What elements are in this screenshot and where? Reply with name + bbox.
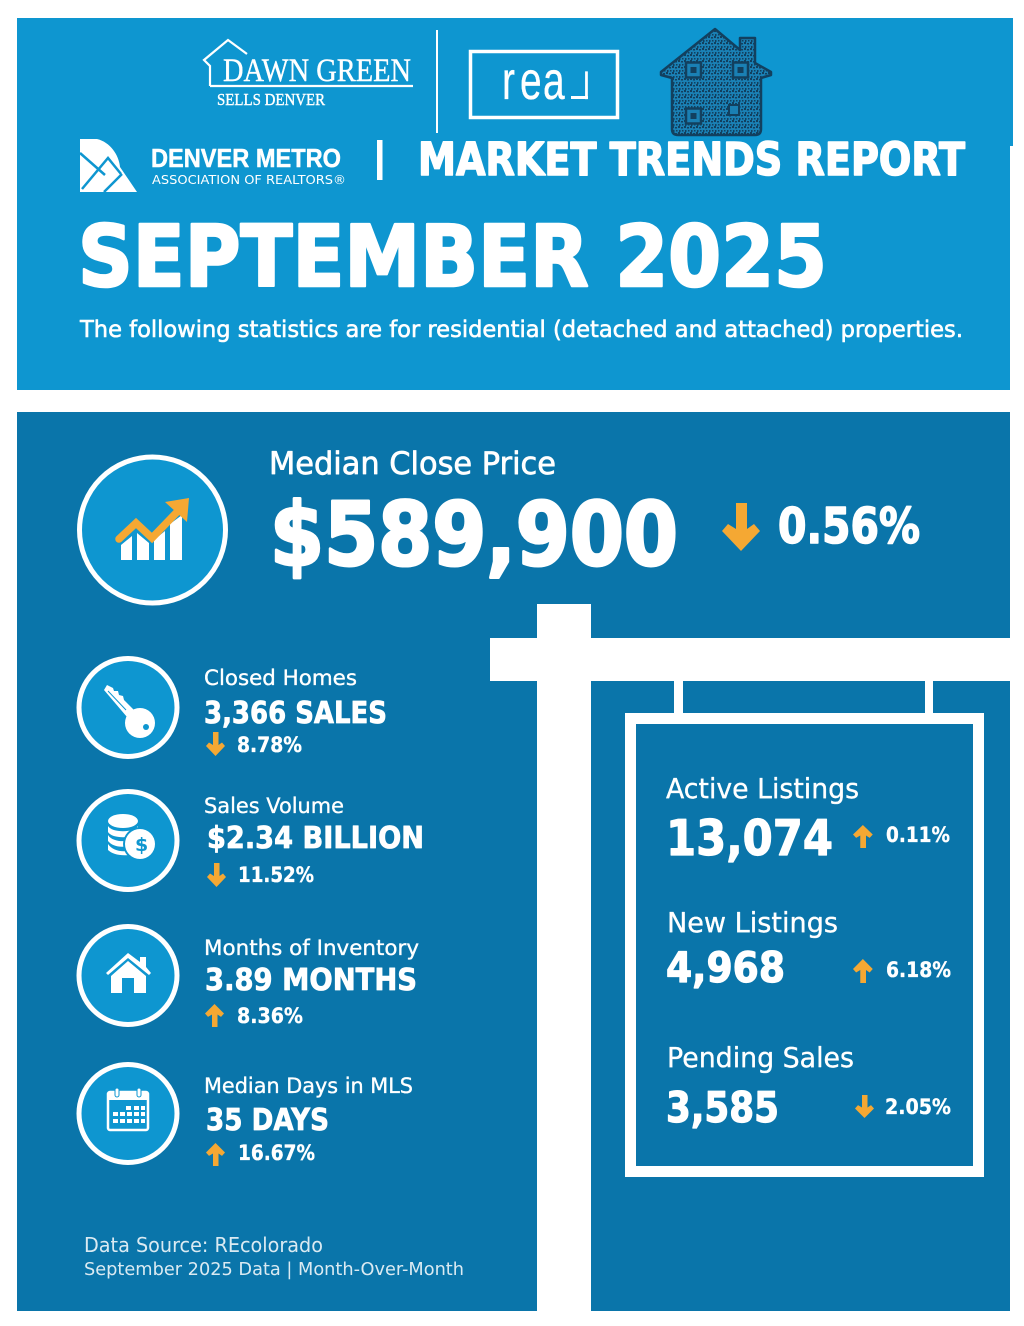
stat: Median Days in MLS: Median Days in MLS bbox=[204, 1074, 413, 1099]
logo: real: r bbox=[502, 50, 515, 110]
heading divider bbox=[377, 140, 382, 180]
stat: Closed Homes: 3,366 SALES bbox=[204, 696, 387, 731]
stat: Median Close Price: Median Close Price bbox=[269, 446, 556, 482]
stat: Sales Volume: 11.52% bbox=[238, 863, 314, 887]
logo: real: l bbox=[583, 66, 589, 108]
stat: Closed Homes: Closed Homes bbox=[204, 666, 357, 691]
arrow: down bbox=[206, 732, 225, 756]
logo divider bbox=[436, 30, 438, 133]
stat: Median Close Price: 0.56% bbox=[778, 498, 920, 555]
stat: Sales Volume: $2.34 BILLION bbox=[207, 821, 424, 856]
icon: rising chart bbox=[80, 457, 226, 603]
stat: Median Days in MLS bbox=[79, 1064, 413, 1166]
stat: Closed Homes: 8.78% bbox=[237, 733, 302, 757]
stat: Pending Sales: 3,585 bbox=[666, 1083, 779, 1132]
arrow: up bbox=[853, 959, 873, 983]
arrow: up bbox=[205, 1004, 224, 1027]
stat: New Listings: 4,968 bbox=[666, 943, 785, 992]
stat: Pending Sales bbox=[666, 1041, 951, 1132]
stat: Months of Inventory: 8.36% bbox=[237, 1004, 303, 1028]
icon: calendar bbox=[79, 1064, 177, 1162]
stat: Pending Sales: 2.05% bbox=[885, 1095, 951, 1119]
icon: coins: $ bbox=[135, 834, 148, 856]
stat: Months of Inventory bbox=[79, 926, 419, 1028]
stat: Median Days in MLS: 16.67% bbox=[238, 1141, 315, 1165]
subtitle: The following statistics are for residential (detached and attached) properties. bbox=[79, 317, 963, 343]
logo: Dawn Green Sells Denver: SELLS DENVER bbox=[217, 90, 326, 109]
data source note bbox=[84, 1233, 464, 1280]
stat: Active Listings bbox=[666, 772, 950, 867]
data panel background bbox=[17, 412, 1010, 1311]
sign board bbox=[630, 718, 978, 1172]
stat: Median Close Price bbox=[80, 446, 920, 603]
stat: Months of Inventory: 3.89 MONTHS bbox=[205, 963, 417, 998]
logo: real: e bbox=[520, 50, 542, 110]
header panel bbox=[17, 18, 1013, 390]
data source note: September 2025 Data | Month-Over-Month bbox=[84, 1259, 464, 1280]
arrow: down bbox=[722, 503, 760, 551]
logo: Denver Metro Association of Realtors bbox=[80, 139, 346, 192]
stat: Pending Sales: Pending Sales bbox=[667, 1041, 854, 1074]
stat: Active Listings: 13,074 bbox=[666, 810, 833, 867]
stat: Months of Inventory: Months of Inventory bbox=[204, 936, 419, 961]
stat: Active Listings: Active Listings bbox=[666, 772, 859, 805]
logo: real bbox=[470, 50, 618, 118]
arrow: up bbox=[853, 825, 873, 848]
logo: Dawn Green Sells Denver bbox=[204, 40, 413, 109]
data source note: Data Source: REcolorado bbox=[84, 1233, 323, 1257]
logo: Dawn Green Sells Denver: DAWN GREEN bbox=[223, 53, 411, 89]
stat: New Listings: New Listings bbox=[667, 906, 838, 939]
icon: house bbox=[79, 926, 177, 1024]
logo: real: a bbox=[543, 50, 565, 110]
stat: New Listings: 6.18% bbox=[886, 958, 951, 982]
arrow: down bbox=[207, 863, 226, 887]
real estate sign post bbox=[490, 604, 1024, 1326]
logo: Denver Metro Association of Realtors: ASSOCIATION OF REALTORS® bbox=[152, 173, 346, 187]
icon: key bbox=[79, 658, 177, 756]
arrow: down bbox=[855, 1095, 874, 1118]
stat: Closed Homes bbox=[79, 658, 387, 757]
icon: QR code house bbox=[661, 29, 771, 135]
stat: New Listings bbox=[666, 906, 951, 992]
stat: Sales Volume bbox=[79, 792, 424, 890]
stat: Median Close Price: $589,900 bbox=[270, 484, 678, 586]
stat: Sales Volume: Sales Volume bbox=[204, 794, 344, 819]
stat: Active Listings: 0.11% bbox=[886, 823, 950, 847]
icon: coins bbox=[79, 792, 177, 890]
stat: Median Days in MLS: 35 DAYS bbox=[206, 1103, 329, 1138]
title: September 2025: SEPTEMBER 2025 bbox=[78, 208, 827, 307]
logo: Denver Metro Association of Realtors: DENVER METRO bbox=[151, 143, 341, 173]
arrow: up bbox=[206, 1143, 225, 1166]
